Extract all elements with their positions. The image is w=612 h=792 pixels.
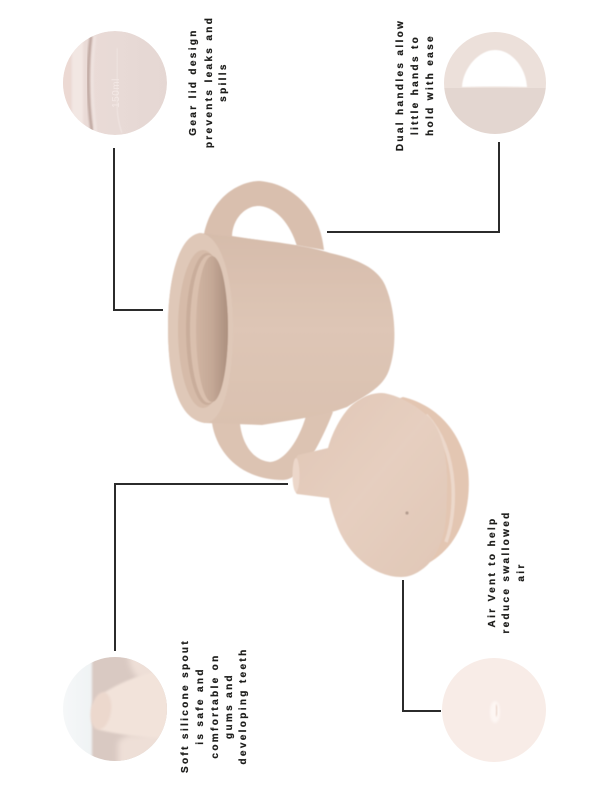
cup rim: [168, 233, 233, 423]
connector: gear lid: [114, 148, 163, 310]
air vent hole: [405, 511, 409, 515]
text: air vent: [487, 510, 527, 634]
text: silicone spout: is safe and: [195, 667, 206, 745]
text: air vent: air: [516, 562, 527, 582]
capacity mark: 150ml: [111, 78, 122, 108]
connector: dual handles: [327, 142, 499, 232]
text: gear lid: [188, 16, 229, 148]
text: silicone spout: [180, 639, 249, 773]
illustration: cup: [168, 181, 394, 480]
text: silicone spout: Soft silicone spout: [180, 639, 191, 773]
photo: spout detail: [63, 657, 167, 761]
cup back handle: [204, 181, 324, 250]
text: gear lid: Gear lid design: [188, 28, 199, 136]
lid ring: [395, 397, 469, 564]
lid dome: [293, 393, 447, 577]
photo: gear lid detail: [60, 30, 167, 136]
cup lower handle: [212, 408, 333, 480]
text: dual handles: [395, 19, 436, 151]
text: silicone spout: gums and: [224, 673, 235, 739]
text: dual handles: little hands to: [410, 35, 421, 135]
text: gear lid: spills: [218, 62, 229, 102]
text: dual handles: hold with ease: [425, 34, 436, 136]
cup opening: [178, 250, 228, 408]
cup body: [168, 233, 394, 425]
text: air vent: reduce swallowed: [501, 510, 512, 634]
connector: silicone spout: [115, 484, 288, 651]
spout opening: [292, 458, 300, 492]
text: dual handles: Dual handles allow: [395, 19, 406, 151]
text: gear lid: prevents leaks and: [204, 16, 215, 148]
text: air vent: Air Vent to help: [487, 517, 498, 627]
text: silicone spout: developing teeth: [238, 647, 249, 765]
illustration: lid: [292, 393, 469, 577]
text: silicone spout: comfortable on: [210, 653, 221, 759]
photo: air vent detail: [442, 658, 546, 762]
photo: dual handle detail: [444, 32, 546, 134]
connector: air vent: [403, 580, 441, 711]
